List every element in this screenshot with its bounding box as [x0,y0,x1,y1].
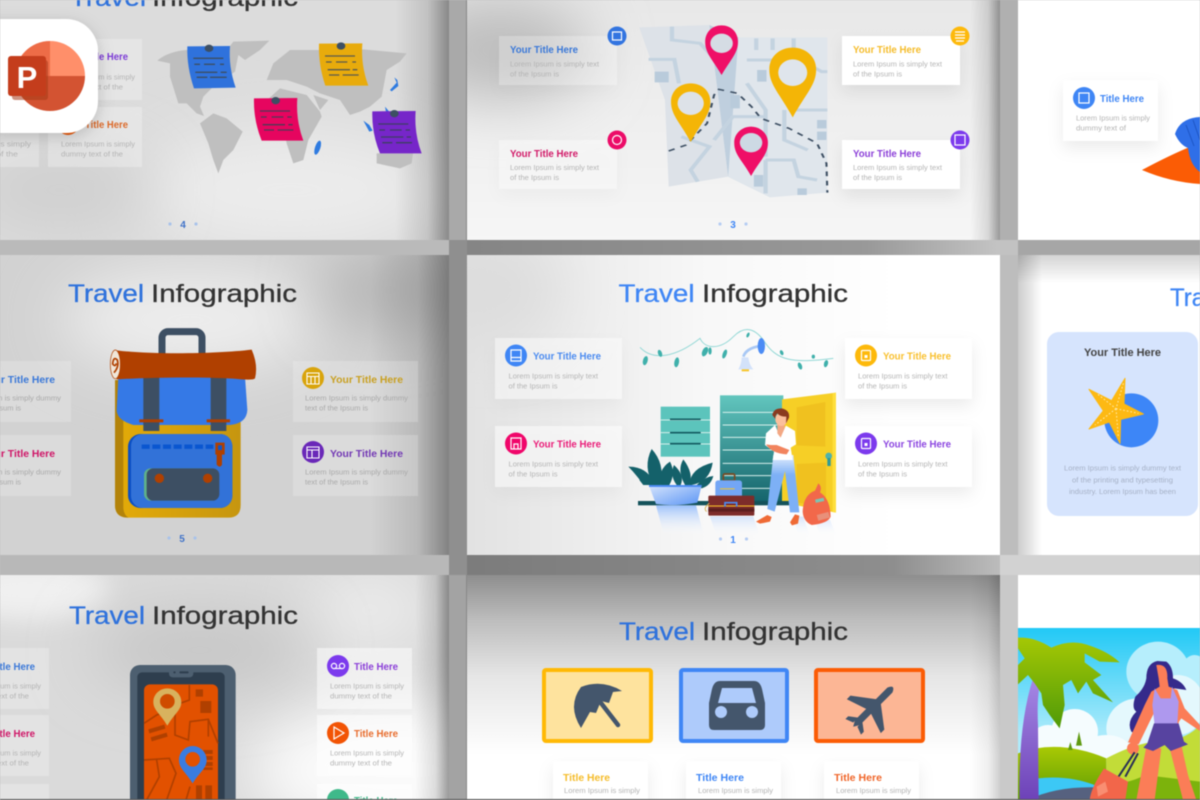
card: purple title: Title Here [85,51,128,63]
wall lamp [738,338,765,371]
card: purple: Your Title Here [883,438,951,450]
card: blue: of the Ipsum is [508,382,558,390]
card: purple: Lorem Ipsum is simply text [853,163,943,172]
card: pink: Lorem Ipsum is simply text [508,460,599,468]
panel: slide 4 world map [0,0,467,250]
card: cropped left [0,107,39,167]
pagination [719,535,748,546]
card: pink: Lorem Ipsum is simply text [510,163,600,172]
card: pink [499,130,626,189]
card: starfish: Lorem Ipsum is simply dummy text [1064,464,1182,472]
card: purple: Your Title Here [853,148,921,160]
card: purple: of the Ipsum is [858,470,907,478]
card: orange title: Title Here [834,772,882,784]
roll [117,350,256,380]
card: purple [842,130,970,189]
card: title here [1063,80,1158,141]
palm fronds [1018,638,1120,728]
card: orange: Title Here [354,728,398,740]
card: yellow title: Title Here [563,772,610,784]
pagination [718,220,748,231]
card: yellow: of the Ipsum is [853,70,902,78]
icon: PowerPoint badge: P [17,60,37,95]
card: blue: Lorem Ipsum is simply text [508,372,599,380]
backpack illustration [110,332,256,518]
world map [157,41,413,173]
note: blue [187,45,236,88]
panel: slide 9 beach traveller [1018,575,1200,800]
gap: beside centre slide [1000,255,1018,555]
card: blue: of the Ipsum is [510,70,559,78]
card: pink: Your Title Here [510,148,578,160]
heading: Travel [68,280,144,308]
heading [619,618,848,646]
door frame [720,395,783,503]
note: purple [372,110,422,153]
card: starfish: Your Title Here [1084,347,1161,359]
panel: slide 3 location map [410,0,1018,240]
card: yellow title [553,761,648,800]
card: blue [499,26,626,85]
frame: bottom hairline [0,799,1200,800]
flap [117,377,247,425]
traveller [756,408,799,525]
card: purple [293,435,418,496]
card: yellow title: Lorem Ipsum is simply [564,786,640,795]
panel: slide 1 main travel infographic [466,254,1000,556]
card: orange title [48,107,142,167]
card: orange [317,715,412,776]
card: yellow: Your Title Here [853,44,921,56]
folded street map with pins [639,25,827,197]
beach illustration [1018,628,1200,800]
orange backpack [803,483,831,525]
card: pink: of the Ipsum is [510,173,559,182]
card: pink cropped [0,435,71,496]
card: orange title [824,761,919,800]
card: yellow: Your Title Here [330,374,403,386]
card: purple: Lorem Ipsum is simply [330,682,404,690]
front pocket [128,434,232,508]
heading: Travel [618,280,694,308]
box: umbrella [544,670,651,741]
card: blue [495,338,622,399]
pin: blue [179,746,207,783]
card: purple title: Lorem Ipsum is simply [61,72,135,82]
card: pink cropped [0,715,49,776]
traveller and backpack [756,408,831,525]
straps [143,377,159,431]
card: blue title [686,761,781,800]
heading: Infographic [152,602,298,630]
card: purple title: dummy text of the [61,82,123,92]
card: purple: Your Title Here [330,448,403,460]
icon: PowerPoint badge [0,19,98,133]
card: orange: dummy text of the [330,758,392,768]
panel: slide 2 transport icons [466,555,1018,800]
card: purple [317,648,412,709]
pagination [167,534,197,545]
pin: pink top [705,25,738,75]
panel: top right slide [1018,0,1200,240]
gap: top of centre slide [467,240,1000,255]
heading: Infographic [151,280,297,308]
card: orange: Lorem Ipsum is simply [330,748,404,758]
vine [640,330,833,370]
heading [618,280,848,308]
floor reflections [656,505,837,537]
card: starfish: of the printing and typesetting [1072,476,1173,484]
card: yellow: Lorem Ipsum is simply text [853,60,943,68]
sticky notes [187,42,422,153]
card: purple title [30,39,142,100]
pagination: 1 [730,535,736,546]
woman legs [1136,745,1196,800]
card: orange title: Lorem Ipsum is simply [61,140,135,148]
heading [69,602,298,630]
floor [638,501,792,505]
card: blue title: Title Here [696,772,744,784]
card: yellow: Your Title Here [883,350,951,362]
wooden panel [661,407,710,457]
woman hair [1130,661,1186,737]
open yellow door [782,393,836,513]
card: starfish: industry. Lorem Ipsum has been [1069,487,1176,496]
heading [68,280,297,308]
card: yellow: Lorem Ipsum is simply dummy [305,394,408,402]
potted plant [628,449,713,505]
card: orange title: Lorem Ipsum is simply [836,786,911,795]
card: blue cropped [0,361,71,422]
shorts [1143,723,1188,751]
panel: slide 7 phone navigation [0,574,466,800]
card: purple [845,426,972,487]
card: yellow cropped [0,784,49,800]
heading [70,0,298,12]
handle [162,332,202,362]
card: yellow: Lorem Ipsum is simply text [858,372,948,380]
card: starfish [1047,332,1198,516]
card: pink: of the Ipsum is [508,470,558,478]
heading: Infographic [702,618,848,646]
clouds [1031,642,1200,762]
card: yellow: of the Ipsum is [858,382,907,390]
pin: pink lower [734,127,768,176]
card: yellow [293,361,418,422]
pagination: 4 [180,220,186,231]
box: car [681,670,787,741]
card: title here: Lorem Ipsum is simply [1076,114,1150,122]
hills [1018,725,1200,800]
card: purple: Title Here [354,661,398,673]
card: pink [495,426,622,487]
pagination: 5 [179,534,185,545]
card: purple: of the Ipsum is [853,173,902,182]
card: yellow [842,26,970,85]
panel: slide 5 backpack [0,240,467,575]
illustration: doorway with traveller [628,330,837,537]
card: pink: Your Title Here [533,438,601,450]
pagination: 3 [730,220,736,231]
card: purple: dummy text of the [330,692,392,700]
card: green cropped [317,784,412,800]
heading: Infographic [702,280,848,308]
icon: shell and starfish crop [1142,117,1200,184]
phone illustration [130,665,236,800]
box: airplane [816,670,923,744]
heading: Travel [69,602,145,630]
brown suitcase [705,496,754,516]
pin: tan [153,688,181,726]
card: blue cropped [0,648,49,709]
card: title here: dummy text of [1076,124,1127,132]
pin: yellow large [769,48,816,117]
icon: starfish on blue circle [1089,378,1158,447]
palm trunk [1018,680,1040,800]
card: purple: Lorem Ipsum is simply text [858,460,948,468]
card: orange title: dummy text of the [61,150,123,158]
blue bag [715,474,742,500]
card: purple: Lorem Ipsum is simply dummy [305,468,408,476]
card: blue title: Lorem Ipsum is simply [698,786,773,795]
note: pink [254,97,303,141]
card: title here: Title Here [1100,93,1144,105]
panel: slide 6 starfish [1000,240,1200,575]
card: blue: Your Title Here [533,350,601,362]
heading: Travel [619,618,695,646]
card: blue: Your Title Here [510,44,578,56]
card: yellow: text of the Ipsum is [305,404,368,412]
woman torso and arms [1128,665,1200,744]
tank top [1152,687,1179,725]
suitcase [1090,752,1138,800]
card: purple: text of the Ipsum is [305,478,368,486]
card: orange title: Title Here [85,119,128,131]
bag body [115,380,241,518]
card: yellow [845,338,972,399]
pin: yellow small [671,83,710,142]
note: yellow [319,42,368,86]
pagination [168,220,198,231]
card: blue: Lorem Ipsum is simply text [510,60,600,68]
